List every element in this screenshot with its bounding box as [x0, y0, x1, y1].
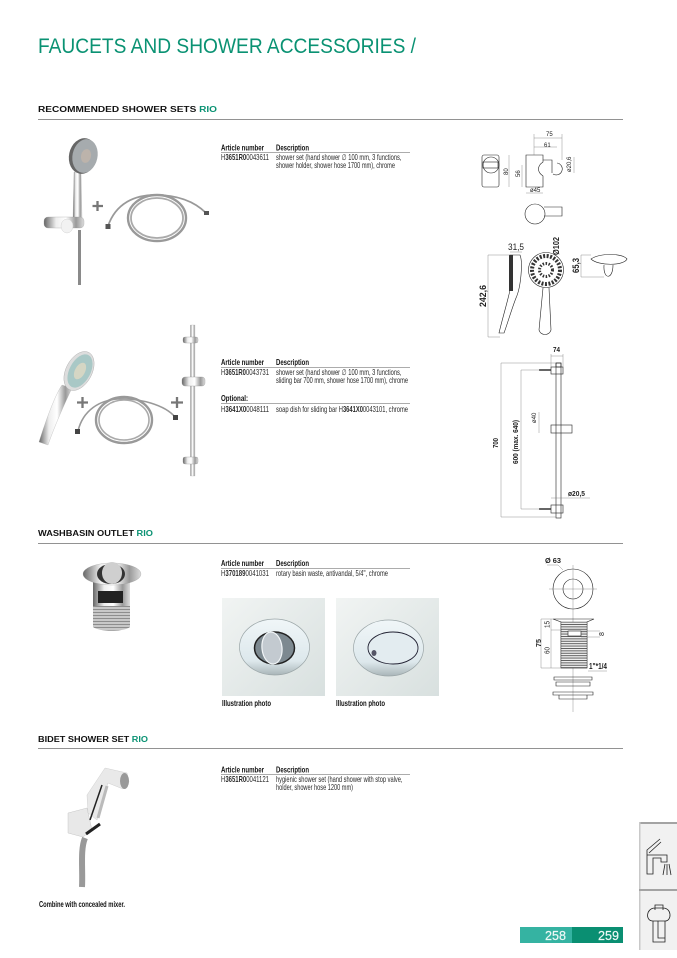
drawing: holder dimensions: 61 — [544, 143, 551, 149]
drawing: basin waste dimensions: 1"*1/4 — [589, 662, 607, 671]
hose — [108, 195, 206, 241]
table: basin waste — [221, 559, 410, 578]
table: shower set 3651R0 0043731 and optional soap dish: Article number — [221, 358, 265, 367]
table: hygienic shower set: hygienic shower set (hand shower with stop valve, — [276, 775, 402, 784]
drawing: sliding bar dimensions: 600 (max. 640) — [513, 420, 520, 464]
note: combine with concealed mixer: Combine with concealed mixer. — [39, 900, 125, 909]
icon: handle — [648, 905, 670, 942]
table: hygienic shower set: Article number — [221, 766, 265, 774]
drawing: basin waste dimensions: Ø 63 — [545, 556, 561, 565]
drawing: sliding bar dimensions: ø20,5 — [568, 491, 585, 498]
drawing: basin waste dimensions: 75 — [534, 639, 543, 647]
drawing: holder dimensions — [482, 132, 574, 224]
table: basin waste: H3701890041031 — [221, 569, 269, 578]
table: basin waste: rotary basin waste, antivandal, 5/4", chrome — [276, 569, 388, 578]
table: shower set 3651R0 0043731 and optional soap dish: sliding bar 700 mm, shower hose 1700 mm), chrome — [276, 376, 408, 385]
drawing: basin waste dimensions: 8 — [599, 632, 606, 636]
page numbers: 258 — [545, 929, 566, 943]
drawing: sliding bar dimensions: 74 — [553, 347, 560, 354]
drawing: holder dimensions: 75 — [546, 132, 553, 138]
image: hand shower, hose and sliding bar — [39, 325, 205, 476]
drawing: hand shower dimensions: 31,5 — [508, 242, 524, 253]
drawing: hand shower dimensions: Ø102 — [551, 237, 561, 255]
table: hygienic shower set: H3651R00041121 — [221, 775, 269, 784]
drawing: holder dimensions: ø20,6 — [567, 156, 573, 172]
side tab with category icons — [639, 822, 677, 950]
drawing: holder dimensions: ø45 — [530, 188, 541, 194]
image: bidet hand shower — [68, 768, 129, 887]
heading: bidet shower set: BIDET SHOWER SET RIO — [38, 734, 148, 744]
image: shower set with holder and hose — [44, 135, 209, 285]
table: shower set 3651R0 0043731 and optional soap dish: Optional: — [221, 394, 248, 403]
drawing: sliding bar dimensions: 700 — [493, 438, 500, 448]
table: shower set 3651R0 0043611 — [221, 144, 410, 170]
drawing: holder dimensions: 80 — [504, 168, 510, 175]
table: shower set 3651R0 0043731 and optional soap dish: Description — [276, 358, 309, 367]
table: basin waste: Article number — [221, 559, 265, 568]
photo: closed waste — [336, 598, 439, 696]
table: shower set 3651R0 0043731 and optional soap dish: H3641X00048111 — [221, 405, 269, 414]
caption: illustration photo: Illustration photo — [222, 699, 271, 708]
table: hygienic shower set: holder, shower hose 1200 mm) — [276, 783, 353, 792]
drawing: sliding bar dimensions: ø40 — [532, 412, 538, 423]
drawing: basin waste dimensions: 15 — [544, 621, 552, 628]
photo: open waste — [222, 598, 325, 696]
drawing: sliding bar dimensions — [493, 347, 590, 518]
table: shower set 3651R0 0043611: Description — [276, 144, 309, 152]
page numbers — [520, 927, 623, 943]
caption: illustration photo: Illustration photo — [336, 699, 385, 708]
table: shower set 3651R0 0043611: Article number — [221, 144, 265, 152]
icon: plus — [92, 201, 103, 211]
table: shower set 3651R0 0043731 and optional soap dish: shower set (hand shower ∅ 100 mm, 3 functions, — [276, 368, 402, 377]
table: shower set 3651R0 0043611: shower set (hand shower ∅ 100 mm, 3 functions, — [276, 153, 402, 162]
drawing: basin waste dimensions: 60 — [544, 647, 552, 654]
heading: washbasin outlet: WASHBASIN OUTLET RIO — [38, 528, 153, 538]
table: hygienic shower set — [221, 766, 410, 792]
title: FAUCETS AND SHOWER ACCESSORIES / — [38, 35, 416, 58]
icon: plus — [171, 397, 183, 408]
table: shower set 3651R0 0043731 and optional soap dish: soap dish for sliding bar H3641X00043101, chrome — [276, 405, 408, 414]
drawing: hand shower dimensions: 242,6 — [478, 285, 489, 307]
table: shower set 3651R0 0043611: shower holder, shower hose 1700 mm), chrome — [276, 161, 395, 170]
icon: plus — [77, 397, 88, 408]
table: shower set 3651R0 0043731 and optional soap dish: H3651R00043731 — [221, 368, 269, 377]
icon: faucet — [647, 839, 671, 875]
image: rotary basin waste — [83, 562, 141, 631]
heading: recommended shower sets: RECOMMENDED SHOWER SETS RIO — [38, 104, 217, 114]
table: basin waste: Description — [276, 559, 309, 568]
drawing: hand shower dimensions: 65,3 — [571, 258, 582, 273]
drawing: basin waste dimensions — [534, 556, 607, 712]
drawing: holder dimensions: 56 — [516, 170, 522, 177]
table: shower set 3651R0 0043731 and optional soap dish — [221, 358, 410, 414]
drawing: hand shower dimensions — [478, 237, 627, 337]
table: hygienic shower set: Description — [276, 766, 309, 774]
page numbers: 259 — [598, 929, 619, 943]
table: shower set 3651R0 0043611: H3651R00043611 — [221, 153, 269, 162]
